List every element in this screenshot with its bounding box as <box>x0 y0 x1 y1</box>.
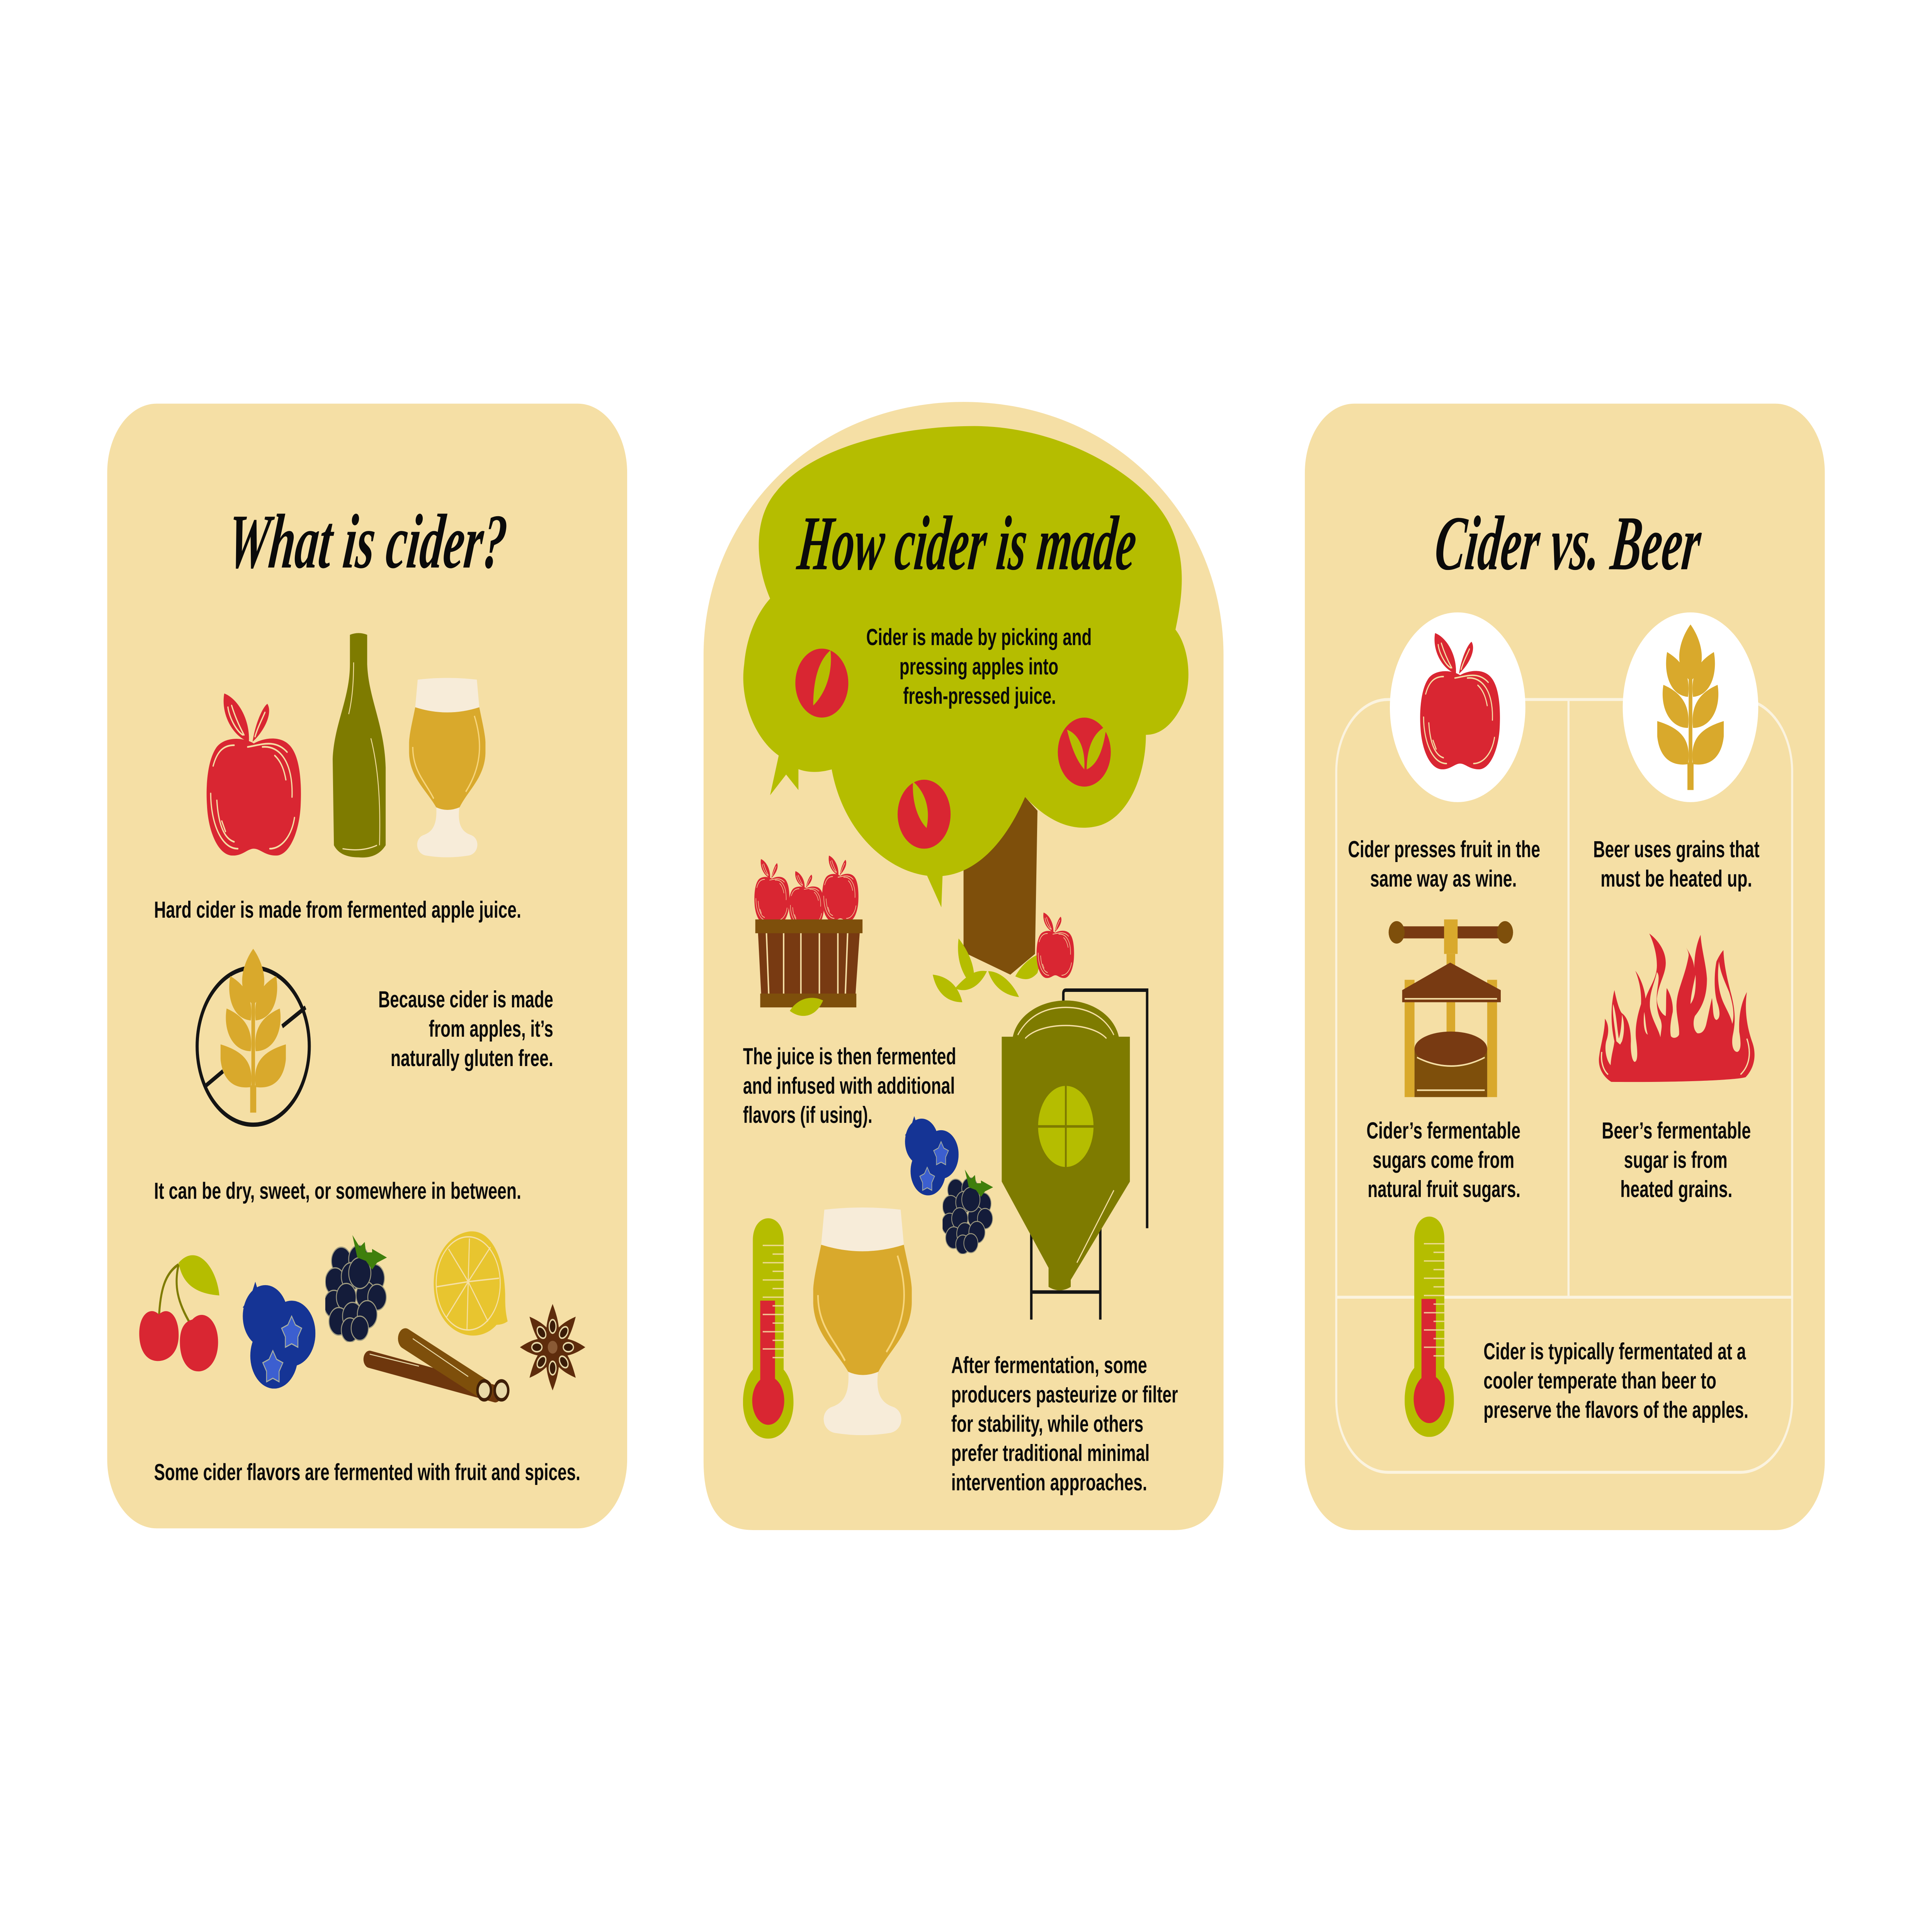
text: temperature <box>1483 1338 1748 1423</box>
text: fermentation: flavors (if using). <box>743 1102 872 1128</box>
text: beer grains <box>1593 837 1760 892</box>
text: after fermentation: for stability, while others <box>951 1411 1143 1437</box>
icon: star anise <box>520 1304 585 1391</box>
text: cider presses: Cider presses fruit in the <box>1348 837 1540 863</box>
text: temperature: cooler temperate than beer to <box>1483 1368 1716 1394</box>
icon: lemon <box>434 1231 508 1335</box>
text: cider sugars: natural fruit sugars. <box>1368 1176 1520 1202</box>
text: temperature: Cider is typically fermentated at a <box>1483 1338 1746 1365</box>
icon: cider glass <box>409 678 486 857</box>
text: cider sugars <box>1366 1117 1520 1202</box>
text: cider presses: same way as wine. <box>1370 866 1517 892</box>
text: beer sugars <box>1602 1117 1751 1202</box>
text: fermentation <box>743 1043 956 1128</box>
text: after fermentation: After fermentation, some <box>951 1352 1147 1378</box>
panel: What is cider? <box>107 404 627 1528</box>
title: Cider vs. Beer: Cider vs. Beer <box>1431 500 1705 586</box>
icon: falling apple <box>1037 913 1074 978</box>
text: after fermentation: producers pasteurize or filter <box>951 1381 1178 1408</box>
text: cider sugars: Cider’s fermentable <box>1366 1117 1520 1144</box>
icon: gluten free wheat <box>197 949 309 1125</box>
icon: cider bottle <box>333 633 386 857</box>
icon: blueberries <box>243 1282 315 1389</box>
icon: blueberries <box>905 1116 959 1196</box>
text: cider presses <box>1348 837 1540 892</box>
text: beer sugars: heated grains. <box>1620 1176 1732 1202</box>
icon: wheat in white circle <box>1623 612 1758 802</box>
icon: cider glass <box>813 1208 912 1435</box>
icon: blackberry <box>324 1235 387 1342</box>
icon: apple in white circle <box>1390 612 1526 802</box>
text: hard cider: Hard cider is made from fermented apple juice. <box>154 897 521 923</box>
text: picking and pressing: Cider is made by picking and <box>866 624 1092 650</box>
panel: How cider is made <box>704 402 1223 1530</box>
icon: apple basket <box>754 855 862 1016</box>
text: beer grains: must be heated up. <box>1600 866 1752 892</box>
text: gluten free <box>378 986 553 1071</box>
icon: thermometer <box>743 1218 794 1439</box>
text: picking and pressing: pressing apples into <box>900 653 1058 680</box>
comparison frame <box>1336 699 1793 1472</box>
panel background <box>704 402 1223 1530</box>
panel background <box>1305 404 1825 1530</box>
icon: cherries <box>139 1255 219 1371</box>
icon: fruit press <box>1389 919 1513 1097</box>
icon: fermentation tank <box>1002 990 1147 1320</box>
text: fruit and spices: Some cider flavors are fermented with fruit and spices. <box>154 1459 580 1485</box>
text: beer sugars: Beer’s fermentable <box>1602 1117 1751 1144</box>
title: How cider is made: How cider is made <box>794 500 1141 586</box>
illustration: apple tree <box>743 426 1189 1002</box>
icon: blackberry <box>942 1170 993 1254</box>
text: fermentation: and infused with additional <box>743 1073 955 1099</box>
panel: Cider vs. Beer <box>1305 404 1825 1530</box>
text: after fermentation: prefer traditional minimal <box>951 1440 1150 1466</box>
panel background <box>107 404 627 1528</box>
title: What is cider?: What is cider? <box>224 498 511 584</box>
icon: apple <box>207 694 301 855</box>
text: beer grains: Beer uses grains that <box>1593 837 1760 863</box>
text: gluten free: naturally gluten free. <box>391 1045 553 1071</box>
icon: flame <box>1599 934 1755 1082</box>
text: cider sugars: sugars come from <box>1372 1147 1514 1173</box>
text: dry or sweet: It can be dry, sweet, or somewhere in between. <box>154 1178 521 1204</box>
text: gluten free: Because cider is made <box>378 986 553 1013</box>
text: after fermentation <box>951 1352 1178 1496</box>
text: picking and pressing <box>866 624 1092 709</box>
text: beer sugars: sugar is from <box>1624 1147 1728 1173</box>
text: picking and pressing: fresh-pressed juice. <box>903 683 1056 709</box>
icon: thermometer <box>1405 1216 1454 1437</box>
text: after fermentation: intervention approaches. <box>951 1469 1147 1496</box>
text: gluten free: from apples, it’s <box>429 1016 553 1042</box>
text: fermentation: The juice is then fermented <box>743 1043 956 1070</box>
icon: cinnamon sticks <box>370 1338 508 1400</box>
text: temperature: preserve the flavors of the apples. <box>1483 1397 1748 1423</box>
